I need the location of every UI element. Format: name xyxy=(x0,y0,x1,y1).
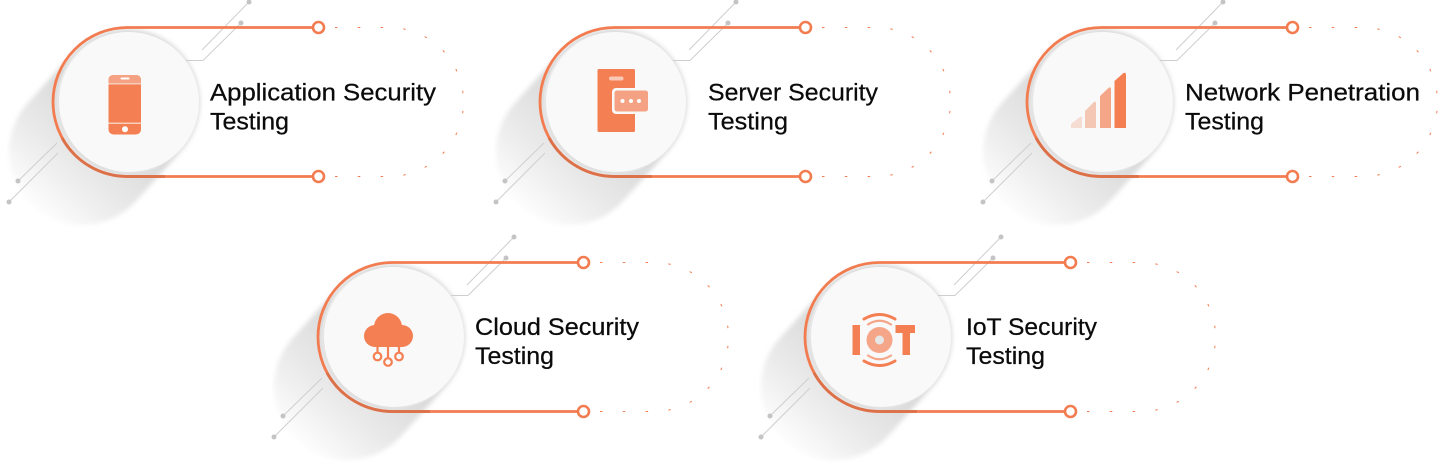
panel: server security testing xyxy=(494,0,950,204)
panel: network penetration testing xyxy=(980,0,1438,204)
panel: application security testing xyxy=(6,0,464,204)
heading: Testing xyxy=(966,343,1045,370)
heading: Network Penetration xyxy=(1185,80,1420,106)
heading xyxy=(966,314,1097,370)
frame: ring, shadow, connectors xyxy=(980,0,1438,204)
heading: Testing xyxy=(475,343,554,370)
panel: cloud security testing xyxy=(272,234,728,440)
heading xyxy=(1185,80,1420,136)
heading xyxy=(708,80,878,136)
frame: ring, shadow, connectors xyxy=(758,234,1216,440)
heading: IoT Security xyxy=(966,314,1097,341)
icon: signal bars xyxy=(1071,73,1126,128)
heading xyxy=(210,80,436,136)
icon: server with message xyxy=(598,69,650,132)
frame: ring, shadow, connectors xyxy=(6,0,464,204)
frame: ring, shadow, connectors xyxy=(494,0,950,204)
frame: ring, shadow, connectors xyxy=(272,234,728,440)
panel: iot security testing xyxy=(758,234,1216,440)
icon: cloud with nodes xyxy=(364,313,413,366)
heading xyxy=(475,314,639,370)
heading: Application Security xyxy=(210,80,436,106)
heading: Testing xyxy=(210,108,289,136)
icon: IoT xyxy=(852,314,915,366)
icon: smartphone xyxy=(108,75,141,134)
heading: Cloud Security xyxy=(475,314,639,341)
heading: Server Security xyxy=(708,80,878,106)
heading: Testing xyxy=(708,108,788,136)
heading: Testing xyxy=(1185,108,1264,136)
